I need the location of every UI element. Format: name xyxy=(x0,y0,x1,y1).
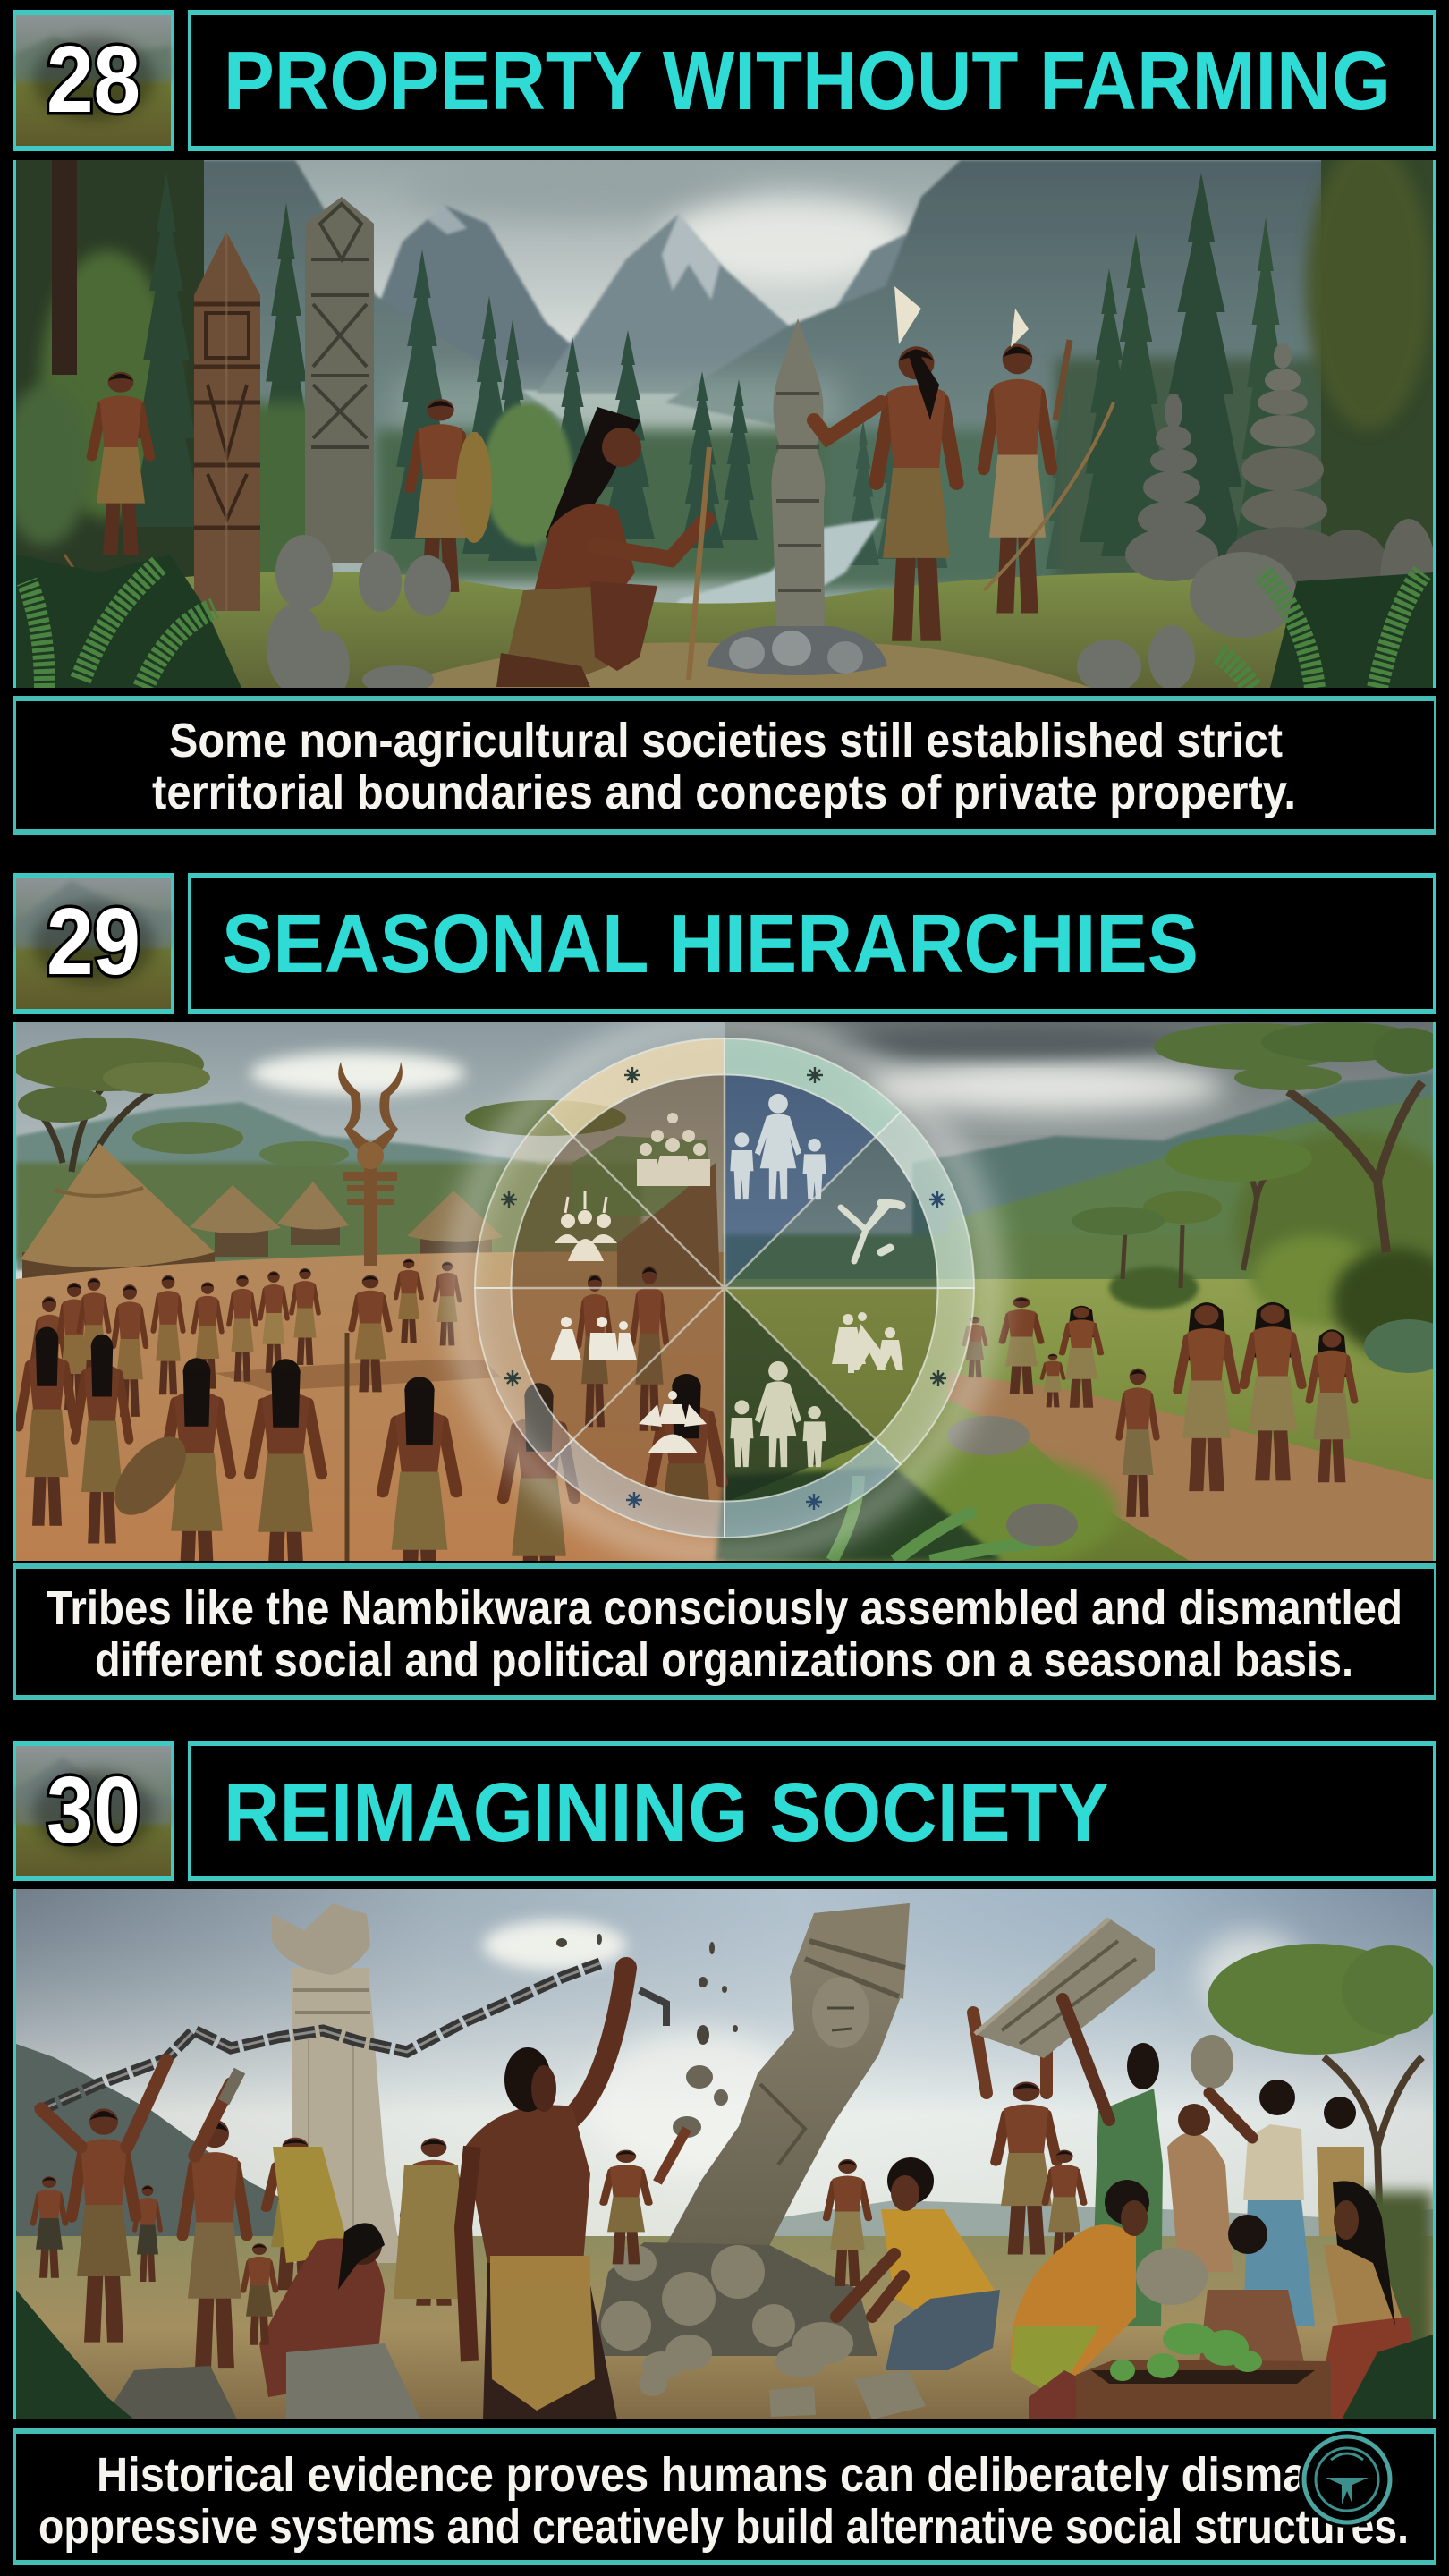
man with bow xyxy=(984,309,1114,614)
ground xyxy=(16,2236,1433,2419)
stone cairns xyxy=(1125,343,1437,644)
ground xyxy=(16,1251,724,1561)
figures beside the rubble xyxy=(604,2129,869,2286)
caption: property: territorial boundaries and concepts of private property. xyxy=(152,766,1296,819)
foreground boulders and plants xyxy=(16,2290,1433,2419)
wheel interior tint xyxy=(510,1073,939,1590)
meadow ground xyxy=(184,572,1286,688)
large thatched hut xyxy=(21,1143,215,1279)
section 28: property without farming xyxy=(0,10,1437,835)
icon: gathering dancers xyxy=(832,1312,903,1373)
falling statue xyxy=(665,1903,910,2250)
icon: dancer with leaf xyxy=(841,1203,902,1261)
gardeners xyxy=(1011,2180,1422,2419)
river xyxy=(676,517,882,603)
central boundary post with stones xyxy=(707,318,887,675)
rocks xyxy=(267,535,1195,702)
heading: seasonal hierarchies: SEASONAL HIERARCHIES xyxy=(222,897,1199,990)
section 30: reimagining society xyxy=(13,1741,1440,2565)
heading: property without farming xyxy=(188,10,1436,151)
right side hills xyxy=(724,1073,1433,1288)
number badge 29 xyxy=(13,873,174,1014)
wheel halo xyxy=(460,1023,989,1553)
icon: circular logo watermark xyxy=(1299,2431,1395,2528)
kneeling woman in yellow shirt xyxy=(836,2157,1000,2370)
distant hills xyxy=(16,2044,358,2236)
foreground plants xyxy=(716,1416,1118,1570)
green shirt man lifting xyxy=(1063,1999,1163,2326)
ferns xyxy=(16,555,1433,688)
kneeling man with staff xyxy=(496,407,709,687)
walking family xyxy=(964,1297,1354,1517)
caption: property xyxy=(13,696,1436,835)
ring season glyphs xyxy=(501,1067,946,1510)
man with feather headdress and post xyxy=(814,286,957,641)
planter box with seedlings xyxy=(1076,2323,1331,2419)
mid-ground conifers xyxy=(376,250,1083,581)
right side grass and forest xyxy=(724,1022,1449,1561)
spokes xyxy=(511,1074,938,1502)
rock lifted overhead xyxy=(975,1919,1155,2058)
icon: elder with two wings xyxy=(639,1391,707,1453)
icon: family, green sector xyxy=(730,1361,826,1467)
number badge 29: 29 xyxy=(47,889,140,995)
number badge 30 xyxy=(13,1741,174,1881)
left forest xyxy=(16,160,305,577)
icon: assembled crowd xyxy=(637,1113,710,1186)
carved wooden post xyxy=(194,232,260,611)
ceremonial totem xyxy=(338,1062,402,1266)
number badge 30: 30 xyxy=(47,1758,140,1863)
outer ring segments xyxy=(475,1038,974,1538)
standing man left xyxy=(63,372,156,567)
man with shield xyxy=(410,399,492,592)
caption: reimagining xyxy=(13,2428,1436,2565)
village hills and trees xyxy=(11,1038,642,1270)
small huts xyxy=(190,1182,503,1261)
left group of figures xyxy=(41,2061,385,2397)
heading: reimagining society: REIMAGINING SOCIETY xyxy=(224,1766,1109,1859)
heading: reimagining society xyxy=(188,1741,1436,1881)
icon: three seated figures xyxy=(550,1317,637,1360)
illustration: people dismantling monuments and planting xyxy=(13,1889,1440,2419)
icon: family, blue sector xyxy=(730,1094,826,1199)
illustration: boundary markers in a mountain valley xyxy=(0,143,1437,702)
rubble pile xyxy=(591,2242,926,2419)
caption: seasonal xyxy=(13,1563,1436,1700)
foreground man breaking chain xyxy=(463,1968,626,2419)
tree on the right xyxy=(1208,1944,1440,2361)
number badge 28: 28 xyxy=(47,27,140,132)
icon: elders under a dome xyxy=(555,1191,617,1261)
background crowd xyxy=(33,2012,1084,2306)
villagers seen from behind xyxy=(19,1326,574,1613)
illustration: village and forest with seasonal wheel xyxy=(11,1022,1449,1613)
heading: seasonal hierarchies xyxy=(188,873,1436,1014)
right group carrying stones xyxy=(1136,2035,1364,2326)
right forest xyxy=(1055,143,1433,598)
flying rock debris xyxy=(556,1934,738,2138)
carved stone post xyxy=(305,197,374,563)
number badge 28 xyxy=(13,10,174,151)
seasonal wheel xyxy=(475,1038,974,1590)
villagers standing in a line xyxy=(33,1259,460,1436)
dirt path xyxy=(948,1373,1433,1561)
section 29: seasonal hierarchies xyxy=(11,873,1449,1700)
caption: property: Some non-agricultural societies still established strict xyxy=(169,714,1283,767)
chain held overhead xyxy=(37,1963,666,2112)
standing column xyxy=(272,1903,402,2263)
